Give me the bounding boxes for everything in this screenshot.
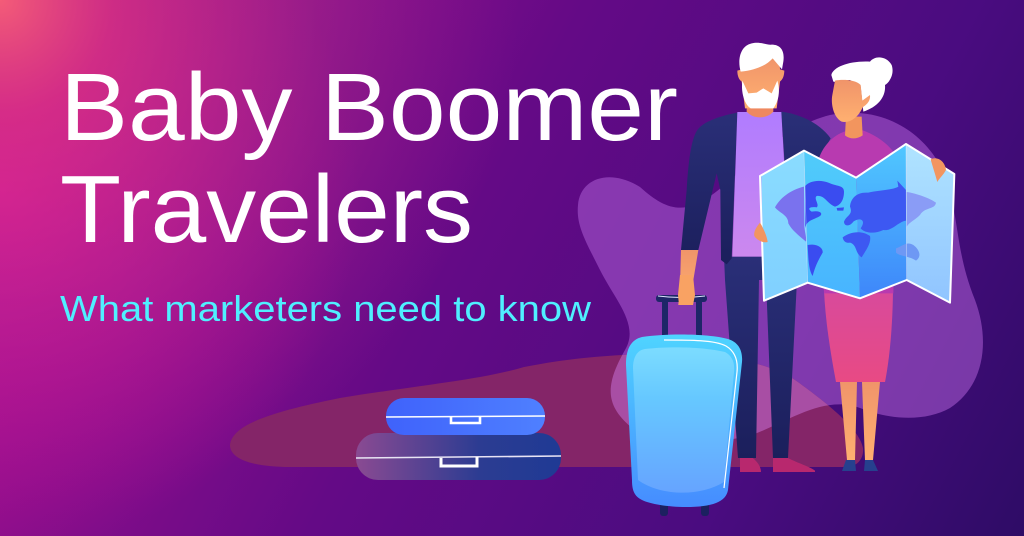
purple blob behind figures (578, 113, 983, 443)
folded world map (754, 144, 954, 303)
legs (840, 382, 880, 460)
shoes (842, 460, 878, 471)
fold shading (804, 144, 907, 283)
front panel (633, 347, 734, 493)
arm and hand (678, 250, 698, 305)
subtitle: What marketers need to know (60, 288, 592, 329)
body (626, 335, 742, 507)
hair (831, 57, 893, 112)
top (818, 130, 897, 293)
face (832, 80, 870, 122)
top case (386, 398, 545, 435)
neck (747, 97, 773, 117)
shirt (732, 112, 786, 257)
neck (845, 117, 863, 138)
title: Baby Boomer (60, 54, 678, 161)
title: Travelers (60, 156, 473, 263)
shoes (740, 458, 815, 472)
ground hill (230, 354, 864, 467)
map border (760, 144, 954, 303)
hand on handle (678, 275, 695, 305)
hair (739, 43, 784, 72)
rolling suitcase (626, 275, 742, 516)
bottom case (356, 433, 561, 480)
right hand on map (931, 158, 946, 182)
title (60, 54, 678, 263)
map panels (761, 144, 954, 303)
continents (775, 181, 936, 276)
face (737, 57, 784, 108)
highlight (664, 340, 737, 488)
skirt (824, 290, 893, 382)
trousers (724, 257, 797, 458)
left hand on map (754, 223, 768, 242)
stacked luggage (356, 398, 561, 480)
beard (742, 81, 779, 108)
jacket (681, 112, 831, 264)
wheels (660, 500, 709, 516)
man (678, 43, 831, 472)
handle (656, 295, 707, 340)
woman (818, 57, 897, 471)
